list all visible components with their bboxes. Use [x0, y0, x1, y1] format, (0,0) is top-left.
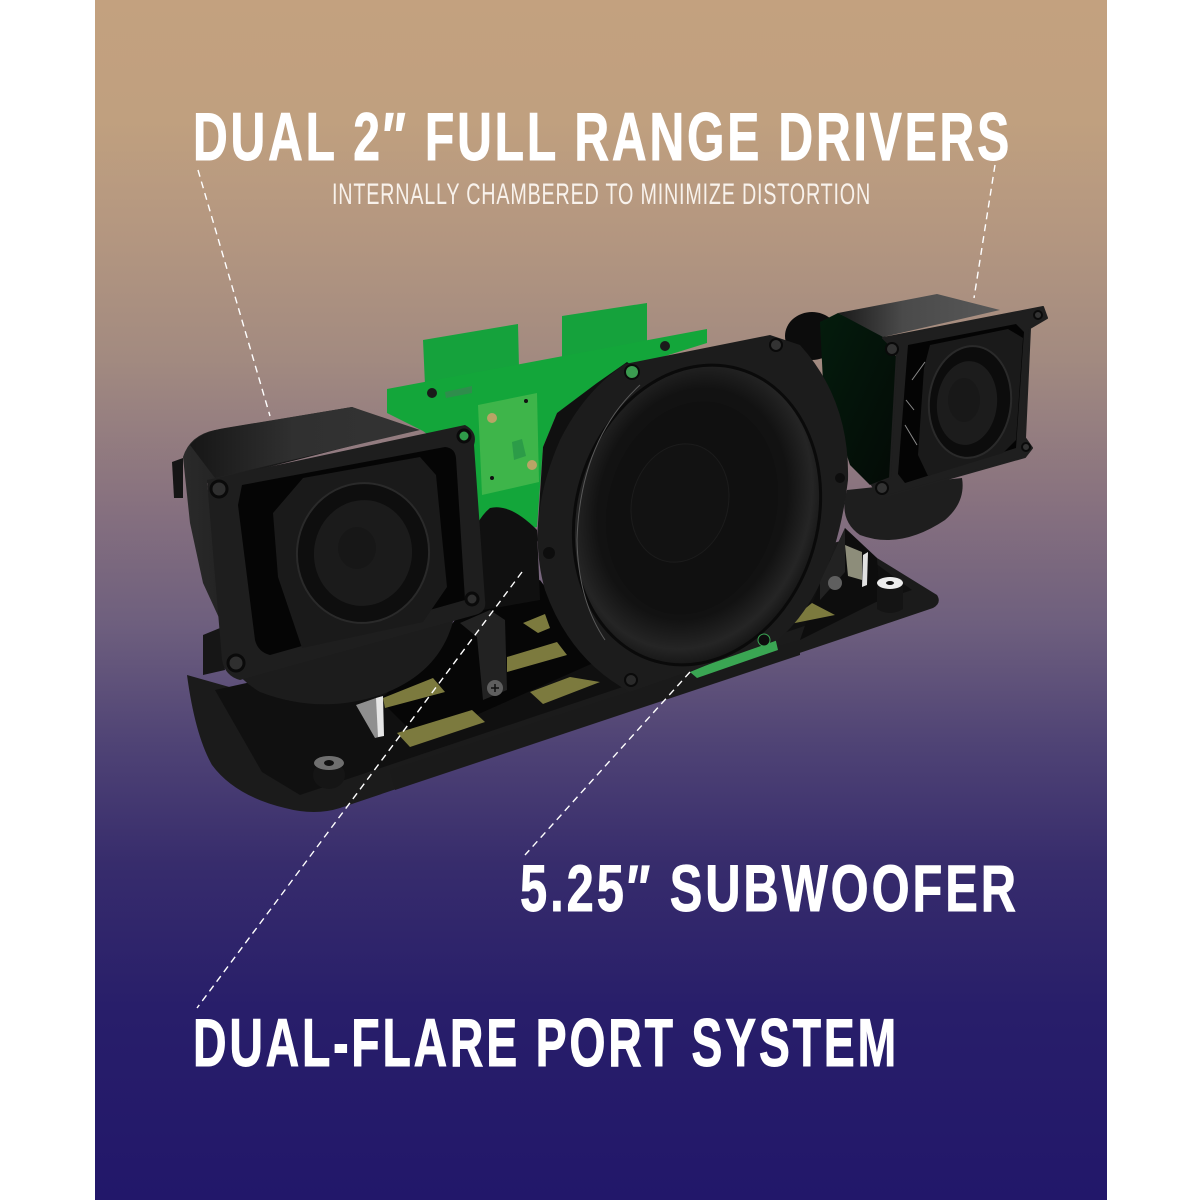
metal connector right [845, 545, 868, 587]
dust cap [617, 432, 743, 574]
metal clip left [356, 696, 384, 738]
box side [820, 313, 897, 485]
green strip [690, 637, 778, 678]
port flare right [785, 312, 839, 360]
lower bowl right [844, 478, 963, 540]
bracket [460, 610, 507, 700]
rear basket [537, 362, 680, 640]
rubber foot left [313, 756, 345, 789]
lower bowl left [220, 600, 457, 704]
rubber foot right [877, 577, 903, 613]
flange [538, 335, 848, 692]
heading: subwoofer: 5.25″ SUBWOOFER [520, 851, 1019, 925]
box top [190, 407, 420, 478]
leader lines [197, 165, 995, 1008]
leader: port [197, 572, 522, 1008]
leader: subwoofer [525, 672, 690, 855]
cone [581, 381, 803, 635]
cone [923, 342, 1017, 462]
subheading: INTERNALLY CHAMBERED TO MINIMIZE DISTORTION [332, 178, 871, 211]
leader: right driver [974, 165, 995, 298]
box side [183, 407, 413, 677]
surround highlight [577, 385, 640, 640]
heading: port: DUAL-FLARE PORT SYSTEM [193, 1005, 899, 1081]
leader: left driver [198, 170, 270, 416]
driver cone [288, 474, 438, 632]
base tray [187, 528, 939, 812]
small circuit board [478, 393, 539, 495]
dual-flare port tube [463, 507, 540, 610]
speaker assembly [172, 294, 1047, 812]
internal wiring [905, 362, 925, 445]
driver plate [273, 457, 447, 648]
flange [872, 307, 1047, 498]
flange [207, 425, 485, 680]
subwoofer [537, 335, 855, 694]
circuit boards [387, 303, 707, 540]
plate [918, 329, 1023, 476]
box top [838, 294, 1000, 337]
tray post left [203, 628, 225, 675]
bracket right [820, 528, 845, 600]
rear clip [172, 458, 183, 498]
left driver [172, 407, 485, 704]
surround [539, 336, 855, 694]
opening [238, 447, 465, 655]
right driver [785, 294, 1047, 540]
gold pads [383, 603, 835, 747]
opening [898, 324, 1024, 483]
